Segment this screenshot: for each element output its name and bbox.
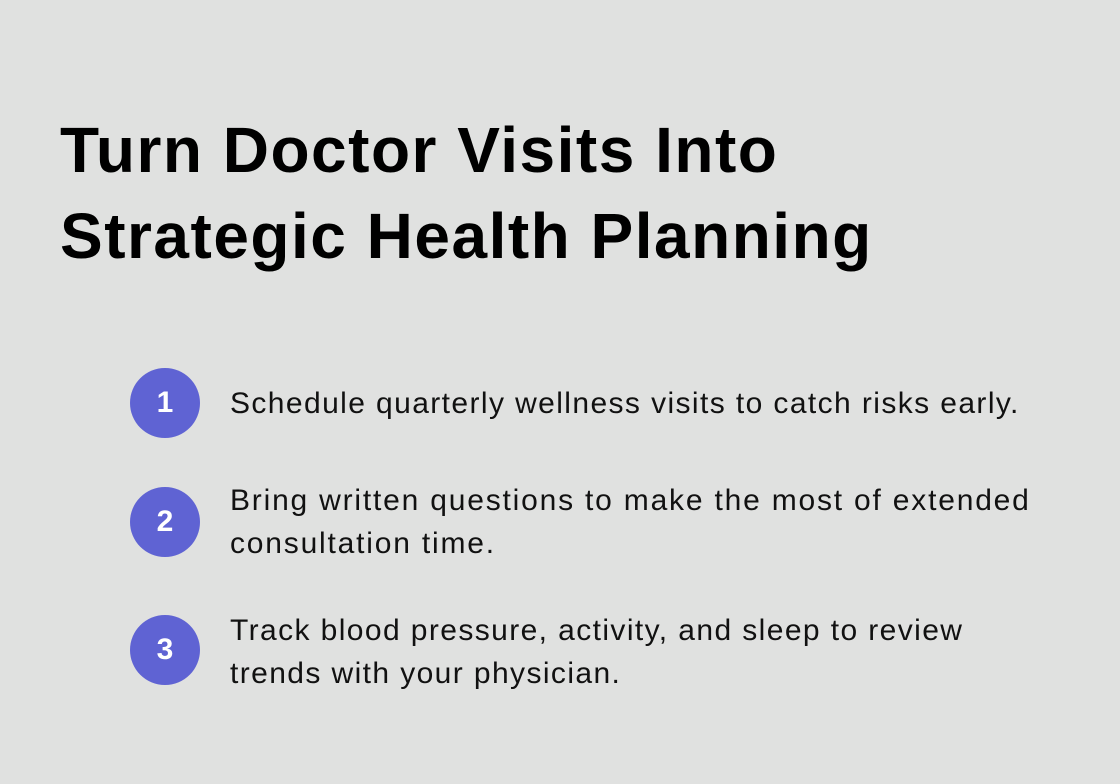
text 3: Track blood pressure, activity, and sleep to review: [230, 614, 963, 647]
title: Turn Doctor Visits Into: [60, 114, 778, 186]
text 3: trends with your physician.: [230, 657, 621, 690]
text 2: [230, 484, 1031, 560]
text 1: Schedule quarterly wellness visits to catch risks early.: [230, 387, 1020, 420]
text 3: [230, 614, 963, 690]
title: Strategic Health Planning: [60, 200, 873, 272]
step 2: [130, 484, 1031, 560]
badge 2: 2: [157, 505, 173, 538]
badge 1: 1: [157, 386, 173, 419]
text 2: consultation time.: [230, 527, 496, 560]
badge 1: [130, 368, 200, 438]
badge 3: 3: [157, 633, 173, 666]
step 3: [130, 614, 963, 690]
step 1: [130, 368, 1020, 438]
badge 2: [130, 487, 200, 557]
title: [60, 114, 873, 272]
text 2: Bring written questions to make the most of extended: [230, 484, 1031, 517]
badge 3: [130, 615, 200, 685]
